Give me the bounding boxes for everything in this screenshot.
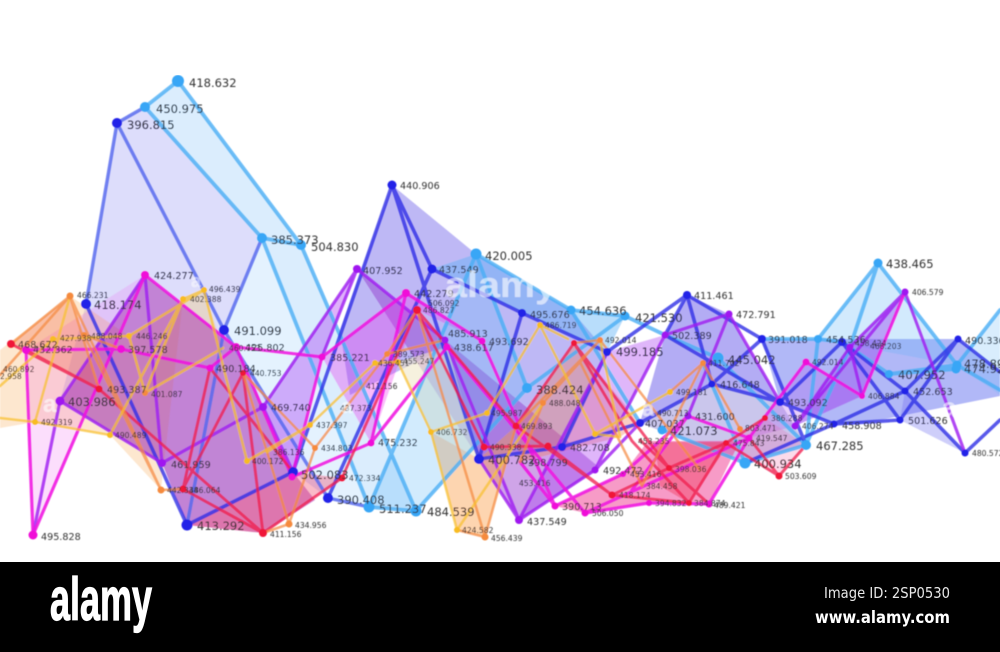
large labels: 421.073 bbox=[670, 424, 718, 438]
large labels: 502.083 bbox=[301, 468, 349, 482]
network chart bbox=[0, 75, 1000, 543]
small labels: 453.416 bbox=[519, 479, 551, 488]
medium labels: 495.828 bbox=[41, 532, 81, 543]
medium labels: 391.018 bbox=[768, 335, 808, 346]
medium labels: 502.389 bbox=[672, 331, 712, 342]
orange edges bbox=[0, 296, 740, 537]
yellow edges bbox=[0, 290, 670, 530]
large labels: 400.934 bbox=[754, 457, 802, 471]
yellow nodes bbox=[32, 287, 673, 533]
small labels: 488.048 bbox=[549, 399, 581, 408]
large labels: 511.237 bbox=[379, 502, 427, 516]
magenta nodes bbox=[22, 271, 865, 540]
translucent mesh fills bbox=[0, 81, 1000, 537]
stock photo watermark: alamy bbox=[445, 264, 557, 305]
small labels: 492.319 bbox=[41, 418, 73, 427]
large labels: 454.636 bbox=[579, 304, 627, 318]
periwinkle edges bbox=[86, 107, 369, 525]
network nodes bbox=[7, 75, 968, 540]
medium labels: 407.952 bbox=[363, 266, 403, 277]
small labels: 453.235 bbox=[638, 437, 670, 446]
small labels: 492.014 bbox=[605, 336, 637, 345]
medium labels: 440.906 bbox=[400, 181, 440, 192]
large labels: 418.632 bbox=[189, 76, 237, 90]
medium labels: 385.221 bbox=[330, 353, 370, 364]
small labels: 442.334 bbox=[167, 486, 199, 495]
medium labels: 416.648 bbox=[720, 380, 760, 391]
medium labels: 438.617 bbox=[454, 343, 494, 354]
medium labels: 501.626 bbox=[908, 416, 948, 427]
stock photo watermark: a bbox=[191, 271, 202, 291]
small labels: 469.893 bbox=[521, 422, 553, 431]
large labels: 484.539 bbox=[427, 505, 475, 519]
small labels: 492.014 bbox=[812, 358, 844, 367]
small labels: 436.451 bbox=[378, 359, 410, 368]
stock photo watermark: a bbox=[942, 392, 957, 422]
small labels: 488.048 bbox=[91, 332, 123, 341]
large labels: 403.986 bbox=[68, 395, 116, 409]
sky blue nodes bbox=[140, 75, 962, 516]
small labels: 400.172 bbox=[252, 457, 284, 466]
large labels: 413.292 bbox=[197, 519, 245, 533]
medium labels: 437.549 bbox=[527, 517, 567, 528]
blue nodes bbox=[81, 118, 968, 530]
medium labels: 398.799 bbox=[528, 458, 568, 469]
small labels: 489.421 bbox=[714, 501, 746, 510]
red nodes bbox=[7, 306, 782, 537]
large labels: 400.782 bbox=[488, 453, 536, 467]
large labels: 418.174 bbox=[94, 298, 142, 312]
medium labels: 452.653 bbox=[913, 387, 953, 398]
small labels: 386.136 bbox=[273, 448, 305, 457]
large labels: 390.408 bbox=[337, 493, 385, 507]
stock photo watermark: a bbox=[43, 391, 57, 418]
medium labels: 424.277 bbox=[154, 271, 194, 282]
stock photo watermark bbox=[43, 264, 957, 422]
small labels: 434.956 bbox=[295, 521, 327, 530]
large labels: 407.952 bbox=[898, 368, 946, 382]
large labels: 438.465 bbox=[886, 257, 934, 271]
large labels: 396.815 bbox=[127, 118, 175, 132]
large labels: 467.285 bbox=[816, 439, 864, 453]
small labels: 490.489 bbox=[115, 431, 147, 440]
large labels: 491.099 bbox=[234, 324, 282, 338]
small labels: 406.884 bbox=[868, 392, 900, 401]
small labels: 384.874 bbox=[694, 499, 726, 508]
medium labels: 454.536 bbox=[826, 335, 866, 346]
small labels: 401.087 bbox=[151, 390, 183, 399]
small labels: 411.156 bbox=[270, 530, 302, 539]
small labels: 486.719 bbox=[545, 321, 577, 330]
small labels: 466.231 bbox=[77, 291, 109, 300]
small labels: 468.203 bbox=[870, 342, 902, 351]
sky blue edges bbox=[145, 81, 1000, 511]
small labels: 486.827 bbox=[423, 306, 455, 315]
medium labels: 425.802 bbox=[245, 343, 285, 354]
medium labels: 469.740 bbox=[271, 403, 311, 414]
large labels bbox=[68, 76, 1000, 533]
small labels: 506.092 bbox=[428, 299, 460, 308]
large labels: 385.373 bbox=[271, 233, 319, 247]
stock photo watermark: a bbox=[341, 396, 353, 418]
small labels: 803.471 bbox=[745, 424, 777, 433]
image id: Image ID: 2SP0530 bbox=[824, 584, 950, 602]
small labels: 434.803 bbox=[321, 444, 353, 453]
small labels: 411.156 bbox=[366, 382, 398, 391]
small labels: 453.416 bbox=[630, 470, 662, 479]
small labels: 472.334 bbox=[349, 474, 381, 483]
small labels: 437.397 bbox=[316, 421, 348, 430]
small labels bbox=[0, 285, 1000, 543]
medium labels: 458.908 bbox=[842, 421, 882, 432]
small labels: 427.938 bbox=[60, 334, 92, 343]
medium labels: 482.708 bbox=[570, 443, 610, 454]
network edges bbox=[0, 81, 1000, 537]
small labels: 455.247 bbox=[403, 357, 435, 366]
medium labels: 493.387 bbox=[107, 385, 147, 396]
medium labels: 437.549 bbox=[439, 265, 479, 276]
small labels: 389.573 bbox=[393, 350, 425, 359]
medium labels bbox=[18, 181, 1000, 543]
orange nodes bbox=[66, 292, 743, 540]
small labels: 418.174 bbox=[619, 491, 651, 500]
website: www.alamy.com bbox=[815, 608, 950, 628]
medium labels: 432.362 bbox=[33, 345, 73, 356]
small labels: 495.987 bbox=[491, 409, 523, 418]
small labels: 394.832 bbox=[655, 499, 687, 508]
small labels: 386.288 bbox=[771, 414, 803, 423]
small labels: 503.609 bbox=[785, 472, 817, 481]
small labels: 490.713 bbox=[657, 409, 689, 418]
medium labels: 492.472 bbox=[603, 466, 643, 477]
small labels: 419.547 bbox=[756, 434, 788, 443]
large labels: 445.042 bbox=[728, 353, 776, 367]
medium labels: 390.713 bbox=[562, 502, 602, 513]
footer bar bbox=[0, 562, 1000, 652]
magenta edges bbox=[26, 275, 905, 535]
violet edges bbox=[33, 269, 965, 535]
small labels: 384.458 bbox=[646, 482, 678, 491]
medium labels: 397.578 bbox=[128, 345, 168, 356]
medium labels: 431.600 bbox=[695, 412, 735, 423]
small labels: 398.036 bbox=[675, 465, 707, 474]
medium labels: 472.791 bbox=[736, 310, 776, 321]
small labels: 446.246 bbox=[136, 332, 168, 341]
large labels: 420.005 bbox=[485, 249, 533, 263]
large labels: 450.975 bbox=[156, 102, 204, 116]
small labels: 460.892 bbox=[3, 365, 35, 374]
medium labels: 485.913 bbox=[448, 329, 488, 340]
small labels: 506.050 bbox=[592, 509, 624, 518]
medium labels: 490.184 bbox=[216, 364, 256, 375]
small labels: 437.373 bbox=[340, 404, 372, 413]
small labels: 411.702 bbox=[708, 359, 740, 368]
violet nodes bbox=[56, 265, 908, 524]
medium labels: 461.959 bbox=[171, 460, 211, 471]
small labels: 406.579 bbox=[912, 288, 944, 297]
red edges bbox=[11, 310, 806, 533]
small labels: 456.439 bbox=[491, 534, 523, 543]
small labels: 496.439 bbox=[209, 285, 241, 294]
small labels: 406.732 bbox=[436, 428, 468, 437]
stock photo watermark: a bbox=[642, 396, 655, 421]
medium labels: 493.692 bbox=[489, 337, 529, 348]
large labels: 421.530 bbox=[635, 311, 683, 325]
medium labels: 407.037 bbox=[645, 419, 685, 430]
small labels: 402.388 bbox=[190, 295, 222, 304]
small labels: 406.274 bbox=[802, 422, 834, 431]
small labels: 440.753 bbox=[250, 369, 282, 378]
small labels: 424.582 bbox=[462, 526, 494, 535]
footer logo: alamy bbox=[50, 566, 152, 633]
medium labels: 495.676 bbox=[530, 310, 570, 321]
small labels: 460.753 bbox=[229, 344, 261, 353]
small labels: 490.338 bbox=[490, 443, 522, 452]
medium labels: 475.232 bbox=[378, 438, 418, 449]
medium labels: 442.279 bbox=[414, 289, 454, 300]
node value labels bbox=[0, 76, 1000, 543]
small labels: 486.064 bbox=[189, 486, 221, 495]
medium labels: 411.461 bbox=[694, 291, 734, 302]
deep blue edges bbox=[86, 185, 1000, 525]
small labels: 499.181 bbox=[676, 388, 708, 397]
large labels: 499.185 bbox=[616, 345, 664, 359]
large labels: 504.830 bbox=[311, 240, 359, 254]
medium labels: 493.092 bbox=[788, 398, 828, 409]
medium labels: 468.672 bbox=[18, 340, 58, 351]
small labels: 458.424 bbox=[855, 339, 887, 348]
large labels: 388.424 bbox=[536, 383, 584, 397]
small labels: 2.958 bbox=[0, 372, 22, 381]
small labels: 475.843 bbox=[733, 439, 765, 448]
